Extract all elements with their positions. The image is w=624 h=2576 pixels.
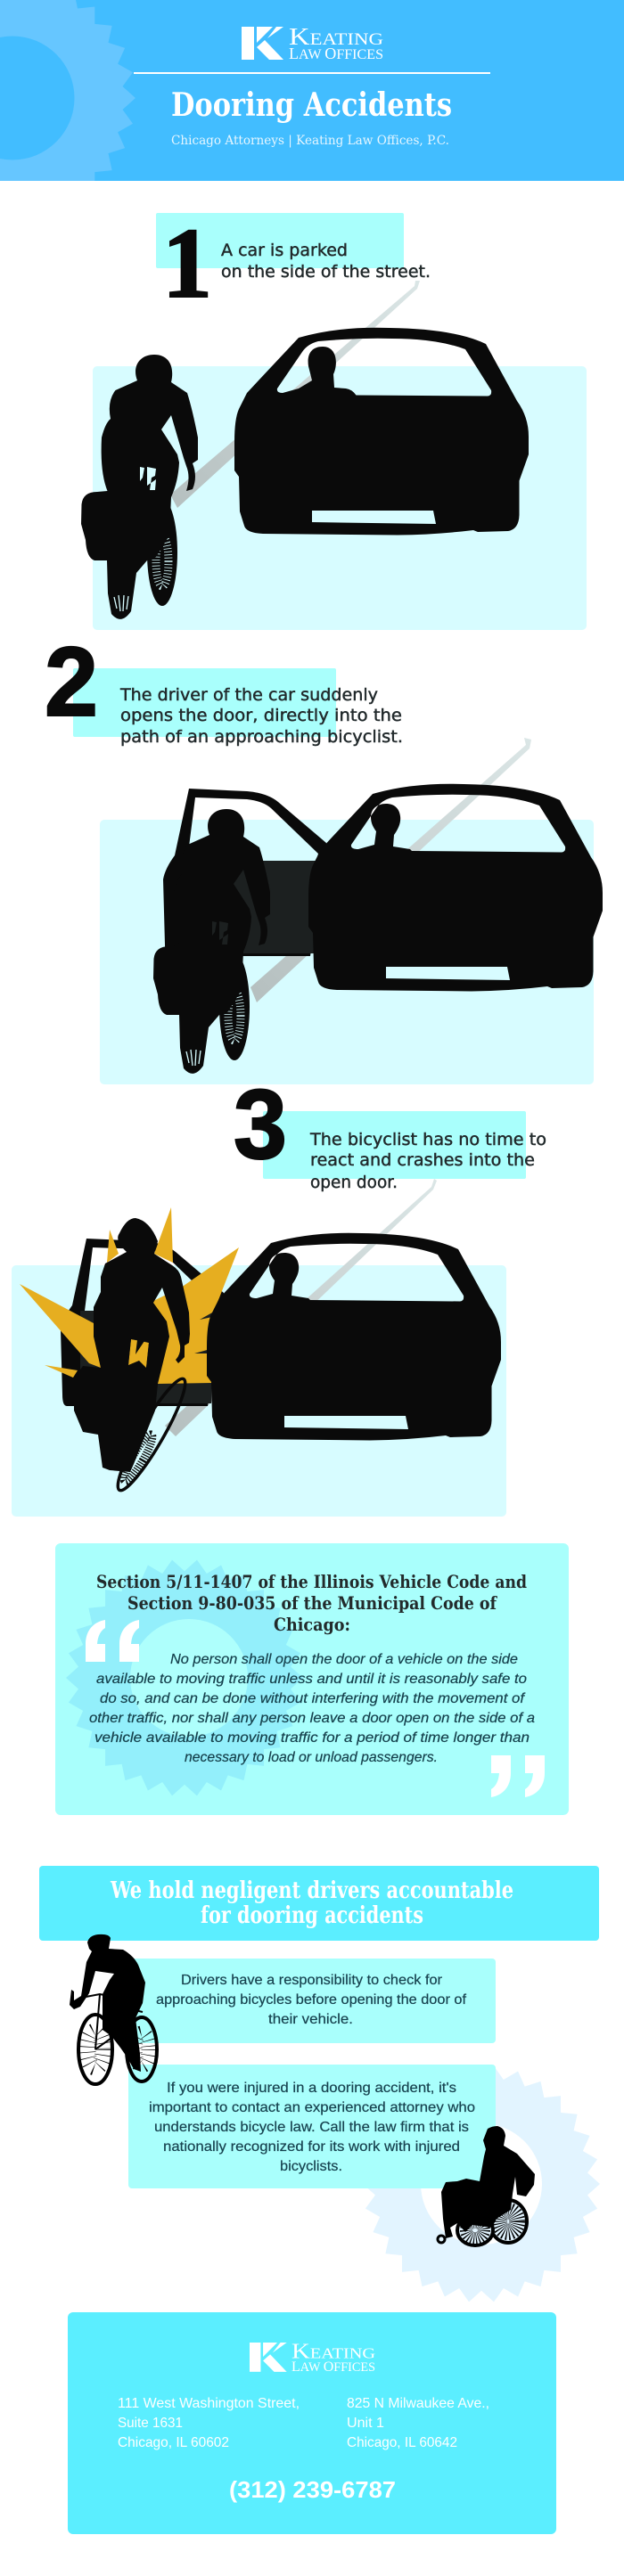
quote text: available to moving traffic unless and until it is reasonably safe to — [96, 1672, 527, 1687]
quote text: No person shall open the door of a vehicle on the side — [170, 1652, 518, 1667]
step 3 caption block: open door. — [310, 1173, 398, 1192]
title: Dooring Accidents — [171, 86, 452, 124]
step 2 caption block: path of an approaching bicyclist. — [120, 727, 403, 747]
text box: contact an attorney: important to contact an experienced attorney who — [149, 2100, 475, 2115]
address: Milwaukee Ave: 825 N Milwaukee Ave., — [347, 2396, 489, 2411]
address: Milwaukee Ave — [347, 2396, 489, 2450]
step 2 caption block: opens the door, directly into the — [120, 706, 402, 725]
step 3 caption block: The bicyclist has no time to — [309, 1130, 546, 1149]
logo: Keating Law Offices — [250, 2341, 375, 2375]
subtitle: Chicago Attorneys | Keating Law Offices, P.C. — [171, 134, 449, 148]
icon: quote panel gear — [66, 1560, 303, 1795]
road shadow line — [250, 738, 531, 1002]
car with driver — [308, 784, 603, 991]
text box: driver responsibility: their vehicle. — [268, 2012, 353, 2027]
icon: header gear — [0, 0, 135, 181]
cyclist rear view — [153, 809, 270, 1074]
header band — [0, 0, 624, 181]
panel: Illinois vehicle code quote — [55, 1543, 569, 1815]
address: Washington Street — [118, 2396, 300, 2450]
text box: driver responsibility — [128, 1959, 496, 2043]
address: Washington Street: Suite 1631 — [118, 2416, 183, 2431]
banner heading — [39, 1866, 599, 1941]
step 2 caption block: 2 — [45, 627, 98, 737]
quote text: vehicle available to moving traffic for a period of time longer than — [94, 1730, 530, 1746]
logo: Keating Law Offices: KEATING — [291, 2341, 375, 2364]
quote heading — [96, 1571, 527, 1635]
step 1 caption block: A car is parked — [221, 241, 348, 260]
icon: wheelchair gear — [363, 2066, 600, 2302]
icon: opening quotes — [86, 1620, 139, 1662]
text box: contact an attorney: nationally recognized for its work with injured — [163, 2139, 460, 2155]
text box: contact an attorney — [128, 2065, 496, 2188]
phone number: (312) 239-6787 — [229, 2476, 396, 2503]
address: Washington Street: Chicago, IL 60602 — [118, 2435, 229, 2450]
logo: Keating Law Offices: LAW OFFICES — [289, 45, 383, 62]
quote heading: Section 9-80-035 of the Municipal Code of — [127, 1592, 497, 1614]
text box: contact an attorney: If you were injured in a dooring accident, it's — [167, 2081, 456, 2096]
car with driver — [234, 328, 529, 535]
footer contact card — [68, 2312, 556, 2534]
cyclist crashing — [74, 1218, 193, 1496]
icon: person in wheelchair — [438, 2126, 535, 2245]
quote text: necessary to load or unload passengers. — [185, 1750, 438, 1765]
cyclist rear view — [81, 355, 198, 619]
quote text: do so, and can be done without interfering with the movement of — [100, 1691, 526, 1706]
quote text — [89, 1652, 535, 1765]
panel: step 2 — [45, 627, 603, 1084]
icon: closing quotes — [491, 1755, 545, 1797]
address: Washington Street: 111 West Washington Street, — [118, 2396, 300, 2411]
step 3 caption block — [234, 1070, 546, 1192]
quote heading: Section 5/11-1407 of the Illinois Vehicle Code and — [96, 1571, 527, 1592]
step 1 caption block: 1 — [162, 209, 212, 319]
banner heading: for dooring accidents — [201, 1902, 423, 1929]
icon: cyclist side view — [70, 1934, 157, 2084]
banner heading: We hold negligent drivers accountable — [110, 1877, 513, 1904]
text box: driver responsibility: approaching bicycles before opening the door of — [156, 1992, 467, 2008]
address: Milwaukee Ave: Unit 1 — [347, 2416, 384, 2431]
logo: Keating Law Offices: KEATING — [289, 23, 383, 50]
text box: contact an attorney: bicyclists. — [280, 2159, 342, 2174]
car with driver — [207, 1233, 501, 1440]
text box: driver responsibility: Drivers have a responsibility to check for — [181, 1973, 443, 1988]
road shadow line — [170, 281, 420, 508]
logo: Keating Law Offices — [242, 23, 383, 62]
open car door — [163, 789, 326, 956]
step 2 caption block — [45, 627, 403, 747]
quote text: other traffic, nor shall any person leave a door open on the side of a — [89, 1711, 535, 1726]
address: Milwaukee Ave: Chicago, IL 60642 — [347, 2435, 457, 2450]
step 1 caption block — [156, 209, 431, 319]
impact burst — [20, 1207, 239, 1384]
step 1 caption block: on the side of the street. — [221, 262, 431, 282]
step 3 caption block: 3 — [234, 1070, 287, 1180]
panel: step 3 — [12, 1070, 546, 1517]
text box: contact an attorney: understands bicycle law. Call the law firm that is — [154, 2120, 469, 2135]
logo: Keating Law Offices: LAW OFFICES — [291, 2359, 375, 2375]
step 2 caption block: The driver of the car suddenly — [119, 685, 378, 705]
open car door — [61, 1239, 224, 1406]
panel: step 1 — [81, 209, 587, 630]
step 3 caption block: react and crashes into the — [310, 1150, 535, 1170]
road shadow line — [165, 1179, 437, 1436]
quote heading: Chicago: — [274, 1614, 350, 1635]
